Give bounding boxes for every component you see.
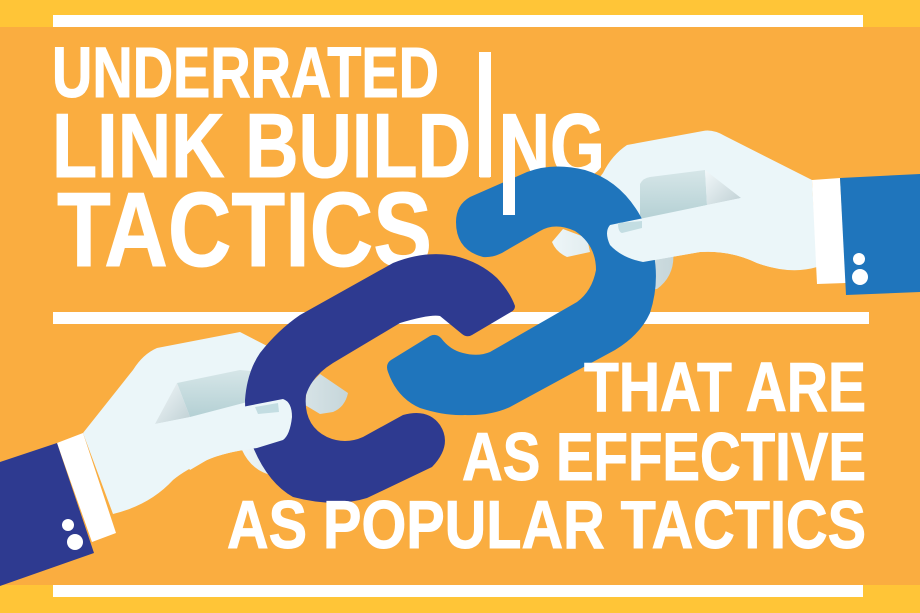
sleeve button, left upper (62, 519, 74, 531)
title: underrated link building tactics (52, 34, 605, 289)
grip hollow, right hand (640, 170, 707, 220)
sleeve button, left lower (67, 534, 83, 550)
grip shadow, right hand (705, 170, 741, 205)
shirt cuff, left (57, 433, 116, 542)
palm, left hand (83, 332, 275, 514)
title: underrated link building tactics: UNDERRATED (52, 34, 439, 113)
left hand with sleeve (0, 332, 348, 586)
grip shadow, left hand (155, 383, 190, 424)
right hand thumb over link (607, 198, 790, 270)
bottom yellow band (0, 585, 920, 613)
grip hollow, left hand (177, 370, 262, 417)
blue chain link (387, 166, 656, 415)
dark blue chain link (245, 254, 515, 503)
thumbnail, left (255, 403, 279, 414)
thumbnail, right (618, 221, 642, 233)
right hand with sleeve (552, 131, 920, 295)
subtitle: that are as effective as popular tactics: THAT ARE (584, 348, 866, 426)
subtitle: that are as effective as popular tactics (227, 348, 866, 563)
back fingers, right hand (552, 229, 673, 290)
palm, right hand (590, 131, 817, 270)
jacket sleeve, right (840, 174, 920, 295)
sleeve button, right lower (852, 269, 868, 285)
sleeve button, right upper (853, 253, 865, 265)
top yellow band (0, 0, 920, 27)
title: underrated link building tactics: TACTICS (57, 171, 432, 289)
bottom white bar (53, 585, 863, 597)
top white bar (53, 15, 863, 27)
title: underrated link building tactics: LINK BUILD (52, 96, 471, 197)
title: underrated link building tactics: I (476, 96, 494, 197)
jacket sleeve, left (0, 443, 94, 586)
left hand thumb over link (155, 399, 292, 470)
middle white divider (53, 312, 869, 324)
back fingers, left hand (240, 374, 348, 476)
title: underrated link building tactics: NG (499, 96, 605, 197)
shirt cuff, right (812, 178, 846, 284)
N stem extending over blue link (503, 114, 515, 215)
